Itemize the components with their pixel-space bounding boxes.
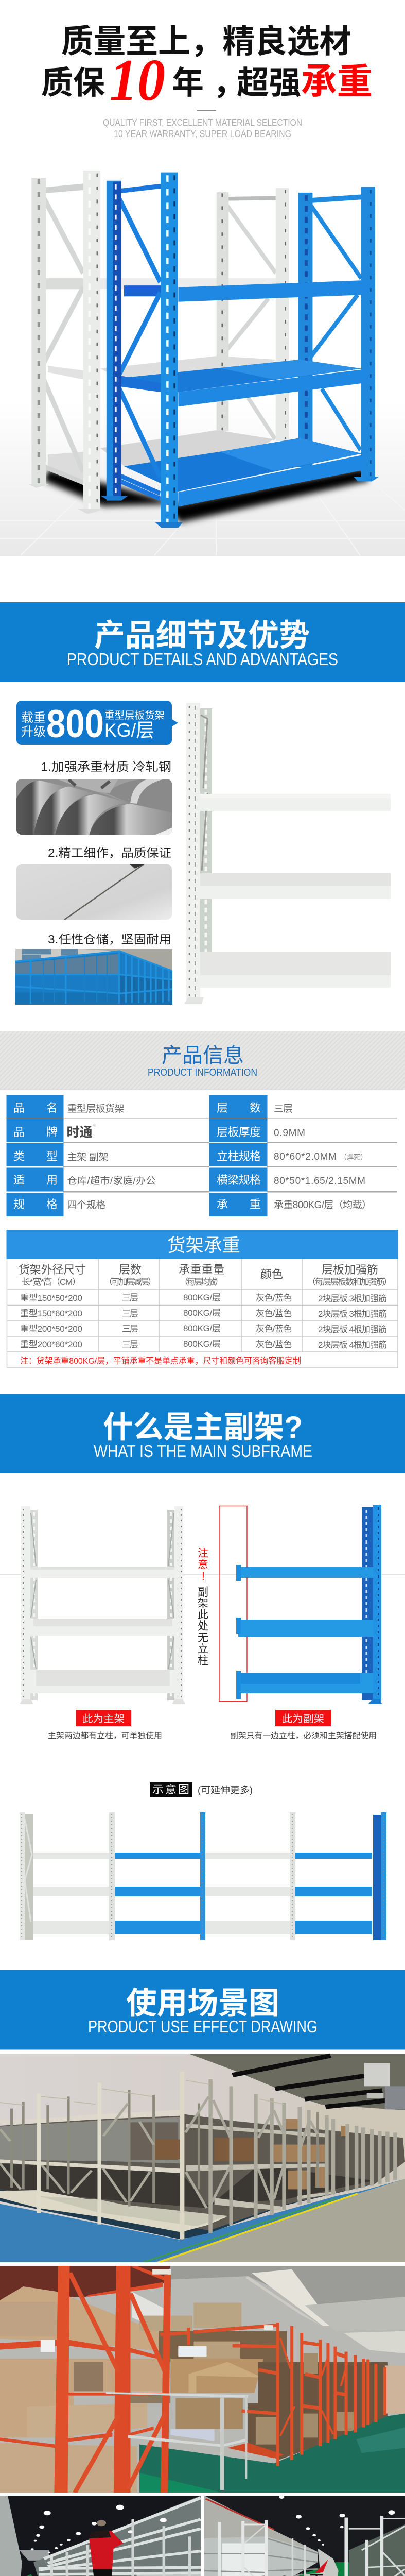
product specification table: ® bbox=[93, 1124, 96, 1128]
product specification table: 80*60*2.0MM bbox=[274, 1151, 337, 1162]
load bearing table: 灰色/蓝色 bbox=[256, 1340, 292, 1349]
load bearing table: 800KG/层 bbox=[183, 1293, 221, 1302]
photo: orange shelves with boxes bbox=[0, 2266, 405, 2493]
product specification table: 四个规格 bbox=[67, 1199, 106, 1211]
product specification table: 数 bbox=[250, 1101, 261, 1114]
section header: product details bbox=[0, 602, 405, 682]
load bearing table: 三层 bbox=[122, 1309, 138, 1318]
load bearing table: 三层 bbox=[122, 1293, 138, 1302]
label: main frame: 此为主架 bbox=[82, 1713, 125, 1725]
feature 1 text: 1.加强承重材质 冷轧钢 bbox=[41, 760, 171, 773]
label: main frame bbox=[76, 1710, 131, 1726]
grid bbox=[7, 1259, 398, 1368]
hero shelving rack bbox=[28, 171, 378, 528]
section header: product details: 产品细节及优势 bbox=[94, 618, 310, 653]
product specification table bbox=[6, 1095, 397, 1216]
load bearing table: 800KG/层 bbox=[183, 1339, 221, 1349]
diagram note: (可延伸更多) bbox=[198, 1785, 253, 1795]
load bearing table: 颜色 bbox=[260, 1268, 283, 1281]
product specification table: 层板厚度 bbox=[217, 1126, 261, 1139]
callout: 800KG per layer: KG/层 bbox=[104, 720, 154, 741]
main frame rack bbox=[20, 1506, 185, 1704]
callout: 800KG per layer: 载重 bbox=[21, 711, 46, 725]
product specification table: 重型层板货架 bbox=[67, 1103, 125, 1114]
section header: use scenes: PRODUCT USE EFFECT DRAWING bbox=[88, 2017, 318, 2036]
section header: use scenes bbox=[0, 1970, 405, 2049]
feature 1 image: steel coils bbox=[16, 779, 172, 835]
product specification table: 型 bbox=[46, 1150, 58, 1163]
product specification table: （焊死） bbox=[340, 1153, 367, 1161]
product specification table: 规 bbox=[13, 1198, 25, 1211]
label: sub frame bbox=[275, 1710, 331, 1726]
product specification table: 承 bbox=[217, 1198, 228, 1211]
product specification table: 立柱规格 bbox=[217, 1150, 261, 1163]
callout: 800KG per layer: 重型层板货架 bbox=[104, 710, 165, 721]
title line two: 质保 bbox=[41, 65, 105, 101]
floor background bbox=[0, 402, 405, 556]
grey rack behind bbox=[28, 171, 289, 514]
data rows: 重型150*50*200 bbox=[20, 1293, 82, 1303]
product specification table: 适 bbox=[13, 1174, 25, 1187]
section header: product information bbox=[0, 1031, 405, 1090]
note: no upright here: 处 bbox=[198, 1620, 208, 1632]
note: no upright here: 此 bbox=[198, 1609, 208, 1621]
section header: main subframe bbox=[0, 1394, 405, 1473]
load bearing table: 2块层板 4根加强筋 bbox=[318, 1340, 387, 1350]
product specification table: 格 bbox=[46, 1198, 58, 1211]
note: no upright here: 无 bbox=[198, 1632, 208, 1644]
sub frame rack bbox=[236, 1505, 382, 1704]
product specification table: 品 bbox=[13, 1126, 25, 1139]
note: no upright here: 立 bbox=[198, 1643, 208, 1655]
label cells bbox=[6, 1095, 268, 1216]
product specification table: 三层 bbox=[274, 1104, 293, 1114]
blue rack bbox=[101, 173, 378, 528]
load bearing table: 层板加强筋 bbox=[322, 1263, 378, 1276]
title line two: 10 bbox=[110, 47, 165, 113]
callout: 800KG per layer: 升级 bbox=[21, 725, 46, 739]
load bearing table: 重型150*60*200 bbox=[20, 1309, 82, 1318]
product specification table: 重 bbox=[250, 1198, 261, 1211]
note: no upright here: 柱 bbox=[198, 1655, 208, 1667]
title line one: 质量至上，精良选材 bbox=[61, 24, 351, 60]
section header: main subframe: 什么是主副架? bbox=[103, 1410, 303, 1445]
product specification table: 用 bbox=[46, 1174, 58, 1187]
feature 2 text: 2.精工细作，品质保证 bbox=[48, 846, 171, 859]
title line two: 超强 bbox=[237, 65, 301, 101]
title line two: ， bbox=[213, 65, 244, 101]
note: no upright here: 副 bbox=[198, 1586, 208, 1598]
hero section bbox=[0, 24, 405, 556]
load bearing table: 800KG/层 bbox=[183, 1324, 221, 1333]
load bearing table: 灰色/蓝色 bbox=[256, 1309, 292, 1318]
product specification table: 80*50*1.65/2.15MM bbox=[274, 1176, 365, 1187]
load bearing table: （每层均放） bbox=[180, 1277, 223, 1287]
load bearing table: 重型200*60*200 bbox=[20, 1340, 82, 1349]
load bearing table: （每层层板数和加强筋） bbox=[307, 1277, 392, 1287]
extended rack diagram bbox=[20, 1812, 386, 1940]
load bearing table: 800KG/层 bbox=[183, 1308, 221, 1318]
load bearing table: 灰色/蓝色 bbox=[256, 1324, 292, 1334]
load bearing table: 2块层板 3根加强筋 bbox=[318, 1309, 387, 1319]
note: no upright here bbox=[198, 1506, 247, 1701]
section header: product information: PRODUCT INFORMATION bbox=[148, 1067, 257, 1078]
load bearing table: 承重重量 bbox=[179, 1263, 224, 1276]
row lines bbox=[63, 1118, 397, 1192]
note: no upright here: ! bbox=[202, 1570, 205, 1582]
load bearing table: 灰色/蓝色 bbox=[256, 1293, 292, 1303]
title line two bbox=[41, 47, 373, 113]
photo: workers with pallet truck bbox=[204, 2496, 405, 2576]
side shelf rack bbox=[184, 703, 391, 1004]
product specification table: 牌 bbox=[46, 1126, 58, 1139]
label: sub frame: 此为副架 bbox=[282, 1713, 324, 1725]
feature 3 text: 3.任性仓储，坚固耐用 bbox=[48, 933, 171, 946]
load bearing table: 长*宽*高（CM） bbox=[22, 1277, 81, 1287]
section header: use scenes: 使用场景图 bbox=[126, 1986, 279, 2021]
note: no upright here: 意 bbox=[198, 1559, 208, 1571]
photo: workers unpacking boards bbox=[0, 2496, 201, 2576]
product specification table: 横梁规格 bbox=[217, 1174, 261, 1187]
product specification table: 品 bbox=[13, 1101, 25, 1114]
load bearing table: 三层 bbox=[122, 1340, 138, 1349]
load bearing table: 2块层板 4根加强筋 bbox=[318, 1325, 387, 1334]
table note: 注：货架承重800KG/层，平铺承重不是单点承重，尺寸和颜色可咨询客服定制 bbox=[20, 1356, 301, 1366]
column headers: 货架外径尺寸 bbox=[19, 1263, 86, 1276]
product specification table: 时通 bbox=[67, 1125, 93, 1140]
note: no upright here: 注 bbox=[198, 1548, 208, 1560]
load bearing table bbox=[6, 1230, 398, 1368]
subtitle bbox=[103, 110, 302, 139]
load bearing table: （可加层减层） bbox=[104, 1277, 156, 1287]
product specification table: 名 bbox=[46, 1101, 58, 1114]
subtitle: QUALITY FIRST, EXCELLENT MATERIAL SELECTION bbox=[103, 117, 302, 128]
load bearing table: 层数 bbox=[119, 1263, 142, 1276]
product specification table: 类 bbox=[13, 1150, 25, 1163]
product specification table: 主架 副架 bbox=[67, 1151, 108, 1163]
load bearing table: 2块层板 3根加强筋 bbox=[318, 1294, 387, 1303]
load bearing table: 三层 bbox=[122, 1324, 138, 1334]
feature 3 image: blue warehouse bbox=[15, 949, 172, 1005]
subtitle: 10 YEAR WARRANTY, SUPER LOAD BEARING bbox=[114, 129, 291, 139]
table heading bbox=[6, 1230, 398, 1259]
feature 2 image: weld detail bbox=[16, 864, 172, 920]
note: no upright here: 架 bbox=[198, 1598, 208, 1609]
load bearing table: 重型200*50*200 bbox=[20, 1324, 82, 1334]
product specification table: 承重800KG/层（均载） bbox=[274, 1199, 372, 1211]
section header: product information: 产品信息 bbox=[162, 1044, 244, 1067]
callout: 800KG per layer: 800 bbox=[46, 702, 104, 746]
section header: product details: PRODUCT DETAILS AND ADVANTAGES bbox=[67, 650, 338, 669]
caption: main frame: 主架两边都有立柱，可单独使用 bbox=[48, 1731, 162, 1740]
title line two: 年 bbox=[172, 65, 204, 101]
diagram label: 示意图 bbox=[152, 1783, 189, 1796]
product specification table: 0.9MM bbox=[274, 1128, 305, 1139]
section header: main subframe: WHAT IS THE MAIN SUBFRAME bbox=[94, 1442, 312, 1461]
photo: beige shelves in warehouse bbox=[0, 2054, 405, 2262]
table heading: 货架承重 bbox=[167, 1235, 240, 1256]
product specification table: 仓库/超市/家庭/办公 bbox=[67, 1175, 155, 1187]
caption: sub frame: 副架只有一边立柱，必须和主架搭配使用 bbox=[230, 1731, 377, 1740]
callout: 800KG per layer bbox=[16, 701, 178, 746]
product specification table: 层 bbox=[217, 1101, 228, 1114]
title line two: 承重 bbox=[301, 62, 373, 101]
